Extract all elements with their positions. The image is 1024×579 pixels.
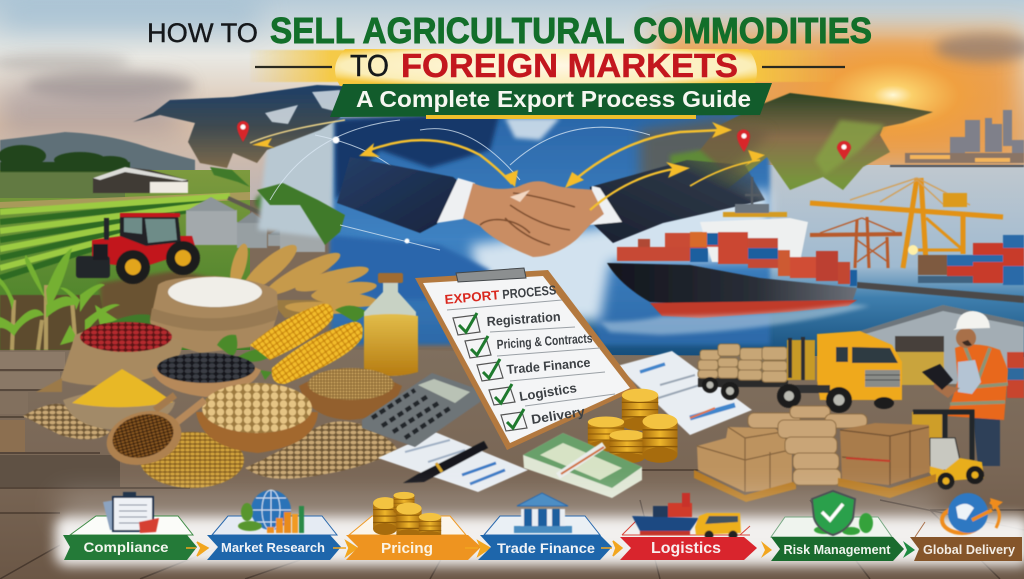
process steps [63, 490, 1022, 561]
step: logistics: Logistics [651, 540, 721, 557]
process step band glow [55, 495, 1024, 566]
documents behind coins [617, 351, 752, 435]
export process heading: EXPORT [444, 287, 500, 307]
ship bridge [700, 177, 808, 262]
spice scoop [101, 395, 205, 473]
black bean bowl [151, 353, 261, 397]
asia and africa [640, 93, 933, 222]
ship hull [607, 263, 857, 305]
green leaves [217, 306, 368, 380]
step: trade finance [478, 493, 622, 560]
clasped hands [463, 181, 604, 257]
table planks [0, 350, 1024, 579]
glowing route lines [270, 120, 650, 250]
north america [133, 85, 345, 168]
left suit sleeve [337, 157, 462, 233]
calculator [362, 373, 483, 447]
red tractor [76, 213, 200, 284]
central america [210, 167, 250, 187]
step: global delivery: Global Delivery [923, 542, 1016, 557]
step: pricing: Pricing [381, 540, 433, 557]
clipboard board [415, 270, 638, 450]
lentil bowl [299, 368, 402, 420]
icon: globe and bar chart [238, 490, 304, 533]
checklist items: Registration [486, 309, 561, 329]
loose beans left pile [23, 404, 110, 439]
farm field [0, 145, 250, 355]
arrow [333, 541, 357, 556]
soybean bowl [196, 383, 318, 453]
world map backdrop [133, 85, 985, 345]
sky with sunset [0, 0, 1024, 200]
port containers [857, 235, 1024, 303]
front crane [810, 178, 1003, 268]
title block [147, 10, 872, 119]
farm barn [93, 167, 188, 193]
checklist items: Delivery [530, 404, 587, 427]
icon: ship and van [632, 493, 741, 540]
grain silos [186, 197, 325, 252]
subtitle banner accent [426, 115, 696, 119]
turmeric powder bowl [63, 369, 175, 430]
yellow ribbon behind title line two [250, 50, 835, 82]
icon: clipboard [103, 492, 159, 533]
title line two: to: TO [350, 48, 389, 83]
cardboard boxes on pallet (right) [838, 423, 936, 498]
export process heading: PROCESS [502, 282, 557, 302]
gold coin stacks [588, 389, 678, 463]
checklist sheet [423, 276, 630, 443]
step: risk management [771, 491, 915, 561]
checklist items: Pricing & Contracts [496, 330, 593, 352]
green check marks [453, 313, 527, 431]
wheat bundle [227, 238, 380, 318]
agricultural produce [23, 238, 418, 488]
export process clipboard [415, 268, 638, 450]
warehouse worker [922, 311, 1008, 466]
icon: shield with check [812, 491, 873, 535]
title line two: foreign markets: FOREIGN MARKETS [401, 47, 738, 84]
arrow [601, 541, 622, 556]
city skyline [890, 110, 1024, 167]
sacks on truck bed [698, 344, 787, 382]
cargo ship [607, 177, 857, 318]
step: compliance: Compliance [84, 539, 169, 555]
cardboard boxes on pallet (left) [694, 427, 796, 502]
south america [257, 183, 345, 245]
forklift [912, 412, 984, 490]
loose beans right pile [245, 421, 397, 479]
step: market research: Market Research [221, 540, 325, 555]
icon: globe with orange arrows [942, 493, 1003, 533]
step: compliance [63, 492, 208, 560]
step: trade finance: Trade Finance [497, 540, 595, 556]
red bean bowl [36, 322, 183, 392]
corn stalks [0, 248, 150, 350]
checklist items: Logistics [518, 380, 578, 404]
title line one: commodity text: SELL AGRICULTURAL COMMODITIES [270, 10, 872, 51]
rice sack [150, 276, 278, 353]
clipboard clip [456, 268, 526, 282]
sea and harbour water [560, 165, 1024, 360]
checklist items: Trade Finance [506, 355, 591, 377]
banknote bundle [523, 433, 642, 498]
red boot stripe [650, 300, 857, 318]
title line one: how to: HOW TO [147, 18, 258, 48]
green subtitle banner [330, 83, 772, 117]
grain sacks stack [748, 406, 867, 485]
step: market research [207, 490, 357, 560]
arrow [186, 542, 208, 556]
quay with cranes [810, 178, 1003, 268]
right suit sleeve [590, 160, 765, 243]
step: global delivery [910, 493, 1022, 561]
decorative ribbon rules [255, 66, 845, 68]
subtitle: A Complete Export Process Guide [356, 86, 751, 112]
stacked containers [617, 232, 857, 286]
rear crane [810, 217, 902, 268]
checklist items [486, 309, 593, 427]
trade route arrows and map pins [237, 120, 851, 210]
distant hills [0, 132, 195, 180]
pale centre plaque [335, 49, 757, 86]
loose grain pile centre [140, 432, 244, 488]
shirt cuffs [437, 178, 622, 225]
checklist rules [447, 300, 615, 406]
step: logistics [620, 493, 772, 560]
oil bottle [364, 273, 418, 376]
arrow [761, 541, 772, 558]
arrow [903, 541, 915, 558]
handshake over the globe [337, 157, 765, 257]
warehouse [857, 305, 1024, 398]
tree line by the silos [255, 189, 344, 237]
icon: bank building [514, 493, 572, 533]
step: risk management: Risk Management [784, 542, 891, 557]
step: pricing [346, 492, 490, 560]
yellow truck [698, 331, 902, 413]
foam and shipping wake [600, 304, 870, 335]
corn cobs [250, 304, 363, 384]
export process heading [444, 282, 557, 307]
invoice paper with pen [378, 432, 528, 492]
arrow [465, 541, 490, 556]
icon: coin stacks [373, 492, 441, 541]
